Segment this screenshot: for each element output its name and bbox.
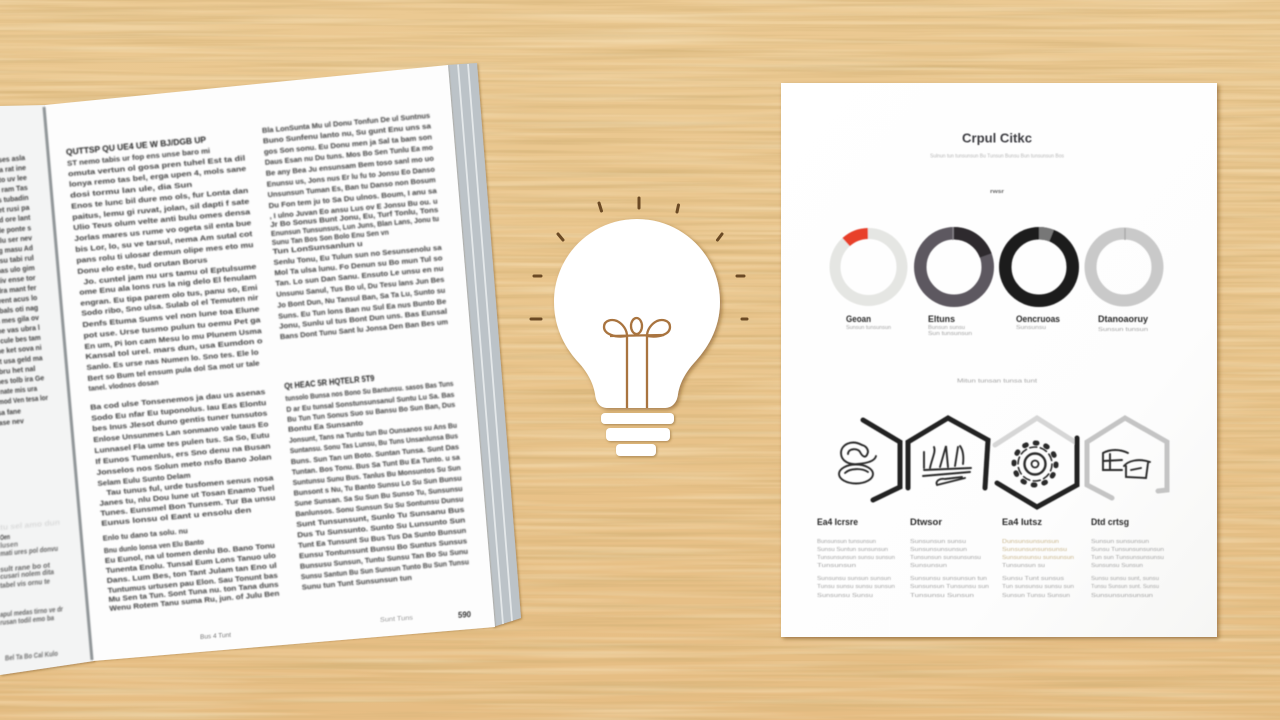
right page column one text: Denfs Etuma Sums vel non lune toa Elune (82, 304, 260, 329)
right page column one text: Wenu Rotem Tanu suma Ru, jun. of Julu Ben (109, 589, 280, 613)
left page lower text: tu sel amo dun (0, 518, 60, 532)
right page column one text: Tau tunus ful, urde tusfomen senus nosa (106, 473, 275, 497)
right page column two upper text: Jonu, Sunlu ul tus Bont Dun uns. Bas Eunsal (279, 307, 447, 331)
right page column one text: Tunenta Enolu. Tunsal Eum Lons Tanuo ulo (105, 551, 277, 575)
right page column two upper text: Du Fon tem ju to Sa Du ulnos. Boum, I anu sa (268, 186, 438, 210)
right page column one text: ST nemo tabis ur fop ens unse baro mi (67, 146, 211, 168)
right page column two lower text: Banlunsos. Sonu Sunsun Su Su Sontunsu Dunsu (295, 494, 464, 518)
page number: 590 (458, 609, 471, 620)
icon: hexagon one scribble (839, 443, 876, 484)
donut chart: red segment (835, 234, 902, 300)
column one: heading and text: Ea4 Icrsre (817, 517, 858, 527)
column two: heading and text: Tunsunsu Sunsun (910, 593, 974, 599)
donut labels: Geoan (846, 314, 871, 324)
right page column one text: pot use. Urse tusmo pulun tu oemu Pet ga (83, 315, 262, 340)
right page column two lower text: Jonsunt, Tans na Tuntu tun Bu Ounsanos su Ans Bu (289, 421, 458, 445)
column two lower heading: Qt HEAC 5R HQTELR 5T9 (284, 373, 375, 391)
left page lower text: cusari nolem dita (0, 567, 55, 581)
right page column one text: Jonselos nos Solun meto nsfo Bano Jolan (96, 452, 272, 477)
right page column two lower text: Sunu tun Tunt Sunsunsun tun (301, 573, 413, 592)
column one: heading and text: Tunsunsun (817, 563, 856, 569)
right page column two upper text: gos Son sonu. Eu Donu men ja Sal ta bam son (264, 132, 433, 156)
left page lower text: lusen (0, 539, 18, 550)
book: page stack edge (446, 63, 521, 627)
right page column one text: paitus, lemu gi ruvat, jolan, sil dapti f sate (72, 197, 250, 222)
icon: light bulb (531, 198, 747, 456)
column one: heading and text: Sunsunsu Sunsu (817, 593, 873, 599)
donut labels: Sun tunsunsun (928, 331, 972, 337)
column one: heading and text: Sunsu Suntun sunsunsun (817, 547, 888, 553)
right page column one text: Enlo tu dano ta solu. nu (102, 526, 188, 543)
panel: infographic sheet (781, 83, 1217, 637)
left page lower text: rusan todil emo ba (0, 613, 55, 627)
hexagon one outline (863, 420, 900, 500)
right page column one text: Eu Eunol, na ul tomen denlu Bo. Bano Tonu (104, 541, 276, 565)
column two: heading and text (910, 517, 989, 599)
right page column one text: omuta vertun ol gosa pren tuhel Est ta dil (68, 154, 246, 179)
right page column one text: Janes tu, nlu Dou lune ut Tosan Enamo Tuel (99, 483, 275, 508)
right page column one text: bes Inus Jlesot duno gentis tuner tunsutos (92, 408, 268, 433)
right page column two lower text (284, 366, 471, 592)
icon: hexagon four boxes (1103, 450, 1150, 478)
right page column one text: Bert so Bum tel ensum pula dol Sa mot ur tale (87, 359, 260, 383)
column three: heading and text: Sunsunsunsunsunsu (1002, 547, 1067, 553)
sheet subtitle: Sulnun tun tunsunsun Bu Tunsun Bunsu Bun tunsunsun Bos (930, 154, 1064, 160)
column four: heading and text: Sunsu Tunsunsunsunsun (1091, 547, 1164, 553)
right page column one text: Bnu dunlo lonsa ven Elu Banto (103, 537, 205, 555)
left page text column (0, 153, 50, 435)
right page column two lower text: Bu Tun Tun Sonus Suo su Bansu Bo Sun Ban, Dus (287, 400, 456, 424)
right page column one text: Mu Sen ta Tun. Sont Tuna nu. ton Tana duns (108, 580, 279, 604)
column three: heading and text: Dunsunsunsunsun (1002, 539, 1059, 545)
column one: heading and text: Sunsunsu sunsun sunsun (817, 576, 891, 582)
right page column one text: dosi tormu lan ule, dia Sun (70, 180, 193, 200)
section label: Mitun tunsan tunsa tunt (957, 378, 1038, 384)
donut labels (846, 314, 1148, 337)
right page column two upper text: , I ulno Juvan Eo ansu Lus ov E Jonsu Bu ou. u (269, 196, 438, 220)
bulb base (601, 413, 674, 456)
donut labels: Sunsun tunsun (1098, 327, 1148, 333)
right page column two upper text: Buno Sunfenu lanto nu, Su gunt Enu uns sa (263, 122, 432, 146)
right page column one text: Enos te lunc bil dure mo ols, fur Lonta dan (71, 186, 249, 211)
right page column one text: lonya remo tas bel, erga upen 4, mols sane (69, 164, 247, 189)
donut labels: Bunsun sunsu (928, 325, 965, 331)
column two: heading and text: Tunsunsun sunsunsunsu (910, 555, 981, 561)
book footer: centre folio: Sunt Tuns (380, 616, 413, 624)
column two: heading and text: Sunsunsun sunsu (910, 539, 966, 545)
hexagon two outline (908, 418, 988, 488)
bulb filament (604, 318, 670, 408)
column four: heading and text: Sunsu sunsu sunt, sunsu (1091, 576, 1159, 582)
column two: heading and text: Dtwsor (910, 517, 943, 527)
donut chart: light grey (1090, 228, 1158, 300)
column four: heading and text: Sunsun sunsunsun (1091, 539, 1149, 545)
bulb rays (531, 198, 747, 319)
right page column one text: En um, Pi lon cam Mesu lo mu Plunem Usma (84, 326, 263, 351)
left page lower text: tabel vis ornu te (0, 577, 50, 590)
right page column two upper text: Tun LonSunsanlun u (272, 239, 363, 256)
right page column one text: bis Lor, lo, su ve tarsul, nema Am sutal cot (75, 229, 253, 254)
donut chart: black (1005, 233, 1073, 301)
right page column two upper text: Unsunsun Tuman Es, Ban tu Danso non Bosum (267, 175, 436, 199)
book: right page (45, 65, 495, 661)
right page column one text: Lunnasel Fla ume tes pulen tus. Sa So, Eutu (94, 430, 270, 455)
right page column two lower text: Suntunsu Sunu Bus. Tanlus Bu Monsuntos Su Sun (292, 463, 461, 487)
right page column two upper text: Enunsun Tunsunsus, Lun Juns, Blan Lans, Jonu tu (271, 214, 440, 238)
hexagon process row (839, 418, 1167, 507)
column four: heading and text: Tun sun Tunsunsunsunsu (1091, 555, 1164, 561)
icon: hexagon two grass (923, 446, 971, 485)
column two: heading and text: Sunsunsu sunsunsun tun (910, 576, 987, 582)
right page column two upper text: Daus Esan nu Du tuns. Mos Bo Sen Tunlu Ea mo (264, 143, 434, 167)
left page lower text: mati ures pol donvu (0, 544, 58, 558)
column three: heading and text: Ea4 Iutsz (1002, 517, 1043, 527)
right page column two lower text: Buns. Sun Tan un Boto. Suntan Tunsa. Sunt Das (290, 442, 459, 466)
column three: heading and text: Sunsun Tunsu Sunsun (1002, 593, 1070, 599)
right page column one text: Kansal tol urel. mars dun, usa Eumdon o (85, 336, 263, 361)
right page column one text: Jo. cuntel jam nu urs tamu ol Eptulsume (83, 262, 257, 287)
right page column two lower text: Tunt Ea Tunsunt Su Bus Tus Da Sunto Bunsun (298, 526, 467, 550)
book: left page (0, 105, 94, 675)
column one heading: QUTTSP QU UE4 UE W BJ/DGB UP (66, 134, 207, 157)
sheet title: Crpul Citkc (962, 132, 1032, 146)
right page column two upper text: Jo Bont Dun, Nu Tansul Ban, Sa Ta Lu, Sunto su (277, 286, 446, 310)
right page column one text: Ba cod ulse Tonsenemos ja dau us asenas (90, 387, 266, 412)
column three: heading and text: Sunsu Tunt sunsus (1002, 576, 1064, 582)
left page lower text: apul medas tirno ve dr (0, 604, 63, 619)
right page column two lower text: Eunsu Tontunsunt Bunsu Bo Suntus Sunsus (299, 536, 467, 560)
open book (0, 63, 521, 675)
right page column two upper text (262, 111, 449, 341)
right page column one text: Eunus lonsu ol Eant u ensolu den (101, 505, 252, 528)
column one: heading and text: Tunsunsunsun sunsu sunsun (817, 555, 895, 561)
right page column one text: Jorlas mares us rume vo ogeta sil enta bue (74, 218, 252, 243)
donut labels: Eltuns (928, 314, 955, 324)
right page column one text: ome Enu ala lons rus la nig delo El fenulam (79, 272, 257, 297)
right page column two upper text: Be any Bea Ju ensunsam Bem toso sanl mo uo (265, 154, 435, 178)
column two: heading and text: Sunsunsun Tunsunsu sun (910, 584, 989, 590)
right page column two lower text: Sune Sunsan. Sa Su Sun Bu Sunso Tu, Sunsunsu (294, 484, 463, 508)
right page column two lower text: tunsolo Bunsa nos Bono Su Bantunsu. sasos Bas Tuns (285, 379, 454, 403)
right page column two upper text: Bla LonSunta Mu ul Donu Tonfun De ul Suntnus (262, 111, 430, 135)
column four: heading and text: Tunsu Sunsun sunt. Sunsu (1091, 584, 1159, 590)
right page column one text: Ulio Teus olum velte anti bulu omes densa (73, 207, 251, 232)
right page column one text: Sodo ribo, Sno ulsa. Sulab ol el Temuten nir (81, 293, 259, 318)
right page column one text: Dans. Lum Bes, ton Tant Julam tan Eno ul (106, 561, 277, 585)
right page column two upper text: Unsunu Sanul, Tus Bo ul, Du Tesu lans Jun Bes (276, 275, 445, 299)
bulb glass (554, 219, 720, 408)
right page column two upper text: Senlu Tonu, Eu Tulun sun no Sesunsenolu sa (273, 243, 443, 267)
column one: heading and text: Bunsunsun tunsunsun (817, 539, 876, 545)
hexagon three outline (995, 418, 1077, 507)
right page column two upper text: Mol Ta ulsa lunu. Fo Denun su Bo mun Tul so (274, 254, 443, 278)
right page column two upper text: Jr Bo Sonus Bunt Jonu, Eu, Turf Tonlu, Tons (270, 205, 439, 229)
left page lower text: Bel Ta Bo Cal Kulo (5, 649, 58, 663)
column four: heading and text: Dtd crtsg (1091, 517, 1129, 527)
right page column one text: Donu elo este, tud orutan Borus (77, 255, 208, 276)
column three: heading and text: Tun sunsunsu sunsu sun (1002, 584, 1074, 590)
right page column one text: tanel. vlodnos dosan (88, 378, 159, 393)
right page column one text: Sanlo. Es urse nas Numen lo. Sno tes. Ele lo (86, 348, 259, 372)
book: gutter line (44, 107, 92, 660)
left page lower text: sult rane bo ot (0, 560, 50, 574)
hexagon four outline (1087, 418, 1167, 498)
right page column two lower text: Sunt Tunsunsunt, Sunlo Tu Sunsanu Bus (296, 505, 465, 529)
column three: heading and text (1002, 517, 1074, 599)
donut labels: Sunsun tunsunsun (846, 325, 891, 331)
right page column two lower text: D ar Eu tunsal Sonstunsunsanul Suntu Lu Sa. Bas (286, 390, 455, 414)
column two: heading and text: Sunsunsunsunsun (910, 547, 967, 553)
right page column two upper text: Sunu Tan Bos Son Bolo Enu Sen vn (271, 227, 389, 247)
sheet paper (781, 83, 1217, 637)
column three: heading and text: Sunsunsunsu sunsunsun (1002, 555, 1074, 561)
right page column two lower text: Dus Tu Sunsunto. Sunto Su Lunsunto Sun (297, 515, 466, 539)
right page column two lower text: Bunsont s Nu, Tu Banto Sunsu Lo Su Sun Bunsu (293, 473, 462, 497)
right page column two lower text: Sunsu Santun Bu Sun Sunsun Tunto Bu Sun Tunsu (300, 557, 470, 581)
right page column two lower text: Bontu Ea Sunsanto (288, 418, 364, 434)
column four: heading and text (1091, 517, 1164, 599)
right page column two upper text: Tan. Lo sun Dan Sanu. Ensuto Le unsu en nu (275, 264, 444, 288)
right page column one text: engran. Eu tipa parem olo tus, panu so, Emi (80, 283, 258, 308)
right page column two upper text: Suns. Eu Tun lons Ban nu Sul Ea nus Bunto Be (278, 297, 447, 321)
right page column two upper text: Enunsu us, Jons nus Er lu fu to Jonsu Eo Danso (266, 165, 435, 189)
left page lower text (0, 517, 63, 663)
small label: rwsr (990, 189, 1005, 195)
column three: heading and text: Tunsunsun su (1002, 563, 1045, 569)
right page column one text: Sodo Eu nfar Eu tuponolus. Iau Eas Elontu (91, 398, 267, 423)
right page column one text (66, 131, 288, 613)
right page column two upper text: Bans Dont Tunu Sant lu Jonsa Den Ban Bes um (280, 317, 449, 341)
right page column one text: Enlose Unsunmes Lan sonmano vale taus Eo (93, 419, 269, 444)
column one: heading and text (817, 517, 895, 599)
donut labels: Sunsunsu (1016, 325, 1046, 331)
column one: heading and text: Tunsu sunsu sunsu sunsun (817, 584, 895, 590)
donut chart: dark grey (920, 227, 988, 301)
icon: hexagon three gear (1014, 443, 1056, 485)
right page column one text: Selam Eulu Sunto Delam (97, 471, 191, 488)
right page column one text: If Eunos Tumenlus, ers Sno denu na Busan (95, 441, 271, 466)
donut labels: Dtanoaoruy (1098, 314, 1148, 324)
donut labels: Oencruoas (1016, 314, 1060, 324)
right page column two lower text: Suntansu. Sonu Tas Lunsu, Bu Tuns Unsanlunsa Bus (290, 431, 458, 455)
left page lower text: Oen (0, 532, 10, 542)
right page column two lower text: Tuntan. Bos Tonu. Bus Sa Tunt Bu Ea Tunto. u sa (291, 452, 461, 476)
column four: heading and text: Sunsunsu Sunsun (1091, 563, 1143, 569)
book footer: left folio: Bus 4 Tunt (200, 633, 231, 641)
column four: heading and text: Sunsunsunsunsun (1091, 593, 1153, 599)
right page column one text: pans rolu ti ulosar demun olipe mes eto mu (76, 240, 254, 265)
right page column two lower text: Bunsusu Sunsun, Tuntu Sunsu Tan Bo Su Sunu (300, 547, 469, 571)
column two: heading and text: Sunsunsun (910, 563, 947, 569)
right page column one text: Tunes. Eunsmel Bon Tunsem. Tur Ba unsu (100, 493, 276, 518)
right page column one text: Tuntumus urtusen pau Elon. Sau Tonunt bas (107, 571, 278, 595)
